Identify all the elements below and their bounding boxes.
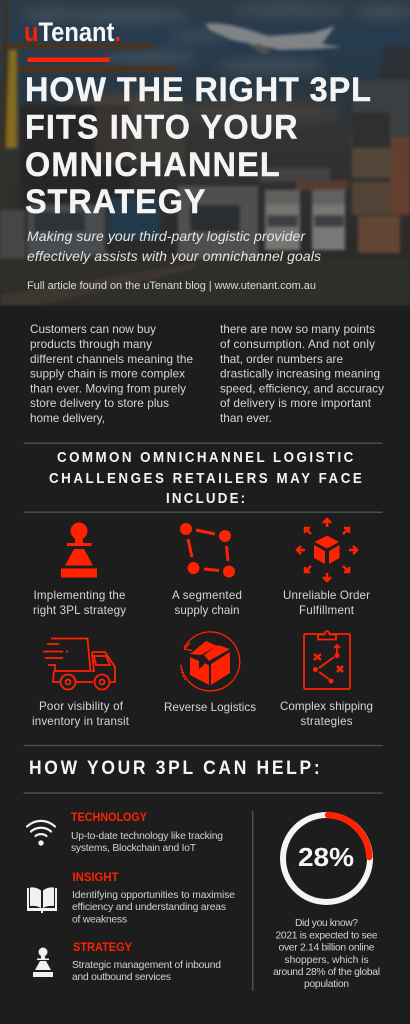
panel: hero photo <box>0 0 410 305</box>
intro text: right column: that, order numbers are <box>220 352 343 366</box>
intro text: left column: than ever. Moving from purely <box>30 382 186 396</box>
trucks <box>265 190 345 205</box>
intro text: left column <box>30 322 193 425</box>
help item: technology: TECHNOLOGY <box>71 810 147 824</box>
challenge label: unreliable fulfillment: Unreliable Order <box>283 589 370 602</box>
challenge label: unreliable fulfillment: Fulfillment <box>299 604 355 617</box>
help item: insight: INSIGHT <box>72 870 119 884</box>
did you know text: shoppers, which is <box>284 955 368 966</box>
challenge label: poor visibility: Poor visibility of <box>39 700 124 713</box>
title: HOW THE RIGHT 3PL <box>25 71 371 109</box>
icon: clipboard strategy <box>304 631 350 689</box>
did you know text: Did you know? <box>295 918 358 929</box>
icon: wifi <box>27 821 55 846</box>
did you know text: around 28% of the global <box>273 967 380 978</box>
intro text: right column: of delivery is more important <box>220 396 372 410</box>
heading: challenges: INCLUDE: <box>166 489 245 506</box>
help item: technology <box>71 810 223 854</box>
heading: how your 3PL can help: HOW YOUR 3PL CAN HELP: <box>29 756 320 778</box>
help item: insight: efficiency and understanding areas <box>72 902 226 913</box>
intro text: left column: home delivery, <box>30 411 105 425</box>
did you know text: over 2.14 billion online <box>278 942 375 954</box>
challenge label: segmented supply chain: A segmented <box>172 589 242 602</box>
did you know text <box>273 918 380 990</box>
challenge label: complex shipping <box>280 700 373 728</box>
heading: challenges: COMMON OMNICHANNEL LOGISTIC <box>57 448 353 465</box>
challenge label: 3PL strategy: right 3PL strategy <box>33 604 126 617</box>
help item: insight <box>72 870 235 926</box>
subtitle: effectively assists with your omnichannel goals <box>27 248 321 264</box>
icon: chess pawn <box>61 522 97 578</box>
icon: box with arrows <box>297 519 357 581</box>
red accent bar <box>28 58 110 62</box>
did you know text: population <box>304 979 349 990</box>
challenge label: complex shipping: strategies <box>300 715 353 728</box>
intro text: left column: Customers can now buy <box>30 322 156 336</box>
plane <box>205 23 342 50</box>
title: FITS INTO YOUR <box>25 109 298 147</box>
challenge label: unreliable fulfillment <box>283 589 370 617</box>
challenge label: 3PL strategy <box>33 589 126 617</box>
title: OMNICHANNEL <box>25 146 280 184</box>
heading: challenges: CHALLENGES RETAILERS MAY FACE <box>49 469 362 486</box>
cranes <box>0 43 175 72</box>
challenge label: poor visibility: inventory in transit <box>32 715 130 728</box>
heading: challenges <box>49 448 362 506</box>
challenge label: reverse logistics: Reverse Logistics <box>164 701 256 714</box>
challenge label: complex shipping: Complex shipping <box>280 700 373 713</box>
intro text: left column: store delivery to store plus <box>30 396 169 410</box>
help item: strategy: and outbound services <box>72 972 171 983</box>
challenge label: 3PL strategy: Implementing the <box>34 589 126 602</box>
source line: Full article found on the uTenant blog | www.utenant.com.au <box>27 280 316 292</box>
icon: delivery truck <box>43 638 115 690</box>
containers <box>378 46 410 80</box>
intro text: right column <box>220 322 384 425</box>
challenge label: segmented supply chain <box>172 589 242 617</box>
help item: strategy <box>72 940 221 983</box>
intro text: right column: there are now so many points <box>220 322 375 336</box>
title: STRATEGY <box>25 183 205 221</box>
icon: open book <box>27 887 57 913</box>
icon: reverse logistics box <box>181 632 240 691</box>
icon: segmented chain <box>180 523 235 578</box>
help item: technology: Up-to-date technology like tracking <box>71 831 223 842</box>
subtitle: Making sure your third-party logistic provider <box>27 228 306 244</box>
logo: uTenant: uTenant. <box>24 17 121 47</box>
intro text: right column: than ever. <box>220 411 272 425</box>
help item: strategy: Strategic management of inbound <box>72 960 221 971</box>
help item: insight: of weakness <box>72 914 127 926</box>
intro text: right column: drastically increasing meaning <box>220 366 380 380</box>
title <box>25 71 371 221</box>
challenge label: poor visibility <box>32 700 130 728</box>
intro text: right column: speed, efficiency, and accuracy <box>220 382 384 396</box>
icon: white pawn <box>33 948 53 977</box>
donut chart: 28 percent <box>283 815 370 902</box>
subtitle <box>27 228 321 264</box>
intro text: left column: supply chain is more complex <box>30 366 185 380</box>
intro text: left column: different channels meaning the <box>30 352 193 366</box>
help item: technology: systems, Blockchain and IoT <box>71 843 197 854</box>
help item: strategy: STRATEGY <box>73 940 132 954</box>
did you know text: 2021 is expected to see <box>276 930 378 942</box>
ship <box>20 105 130 240</box>
help item: insight: Identifying opportunities to maximise <box>72 890 235 901</box>
donut chart: 28 percent: 28% <box>298 842 354 872</box>
intro text: left column: products through many <box>30 337 152 351</box>
intro text: right column: of consumption. And not only <box>220 337 375 351</box>
challenge label: segmented supply chain: supply chain <box>174 604 240 617</box>
